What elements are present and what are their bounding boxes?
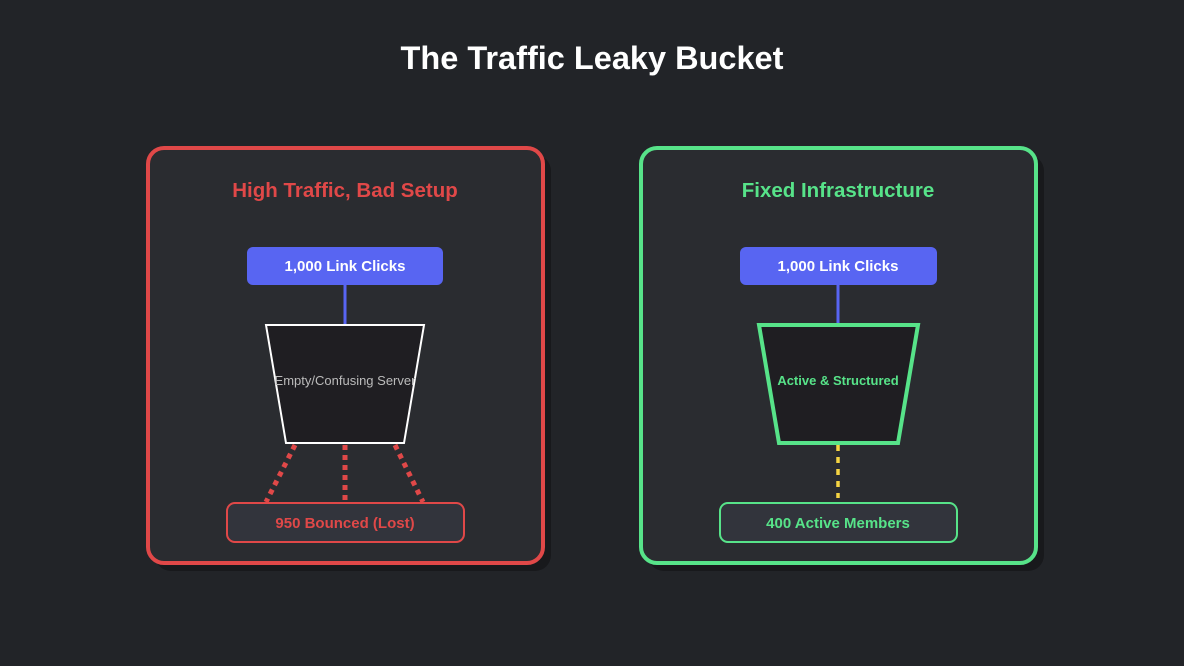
box: link clicks left: [247, 247, 443, 285]
connector right: [836, 285, 840, 325]
title: The Traffic Leaky Bucket: [401, 40, 784, 76]
box: bounced: [227, 503, 464, 542]
box: link clicks right: 1,000 Link Clicks: [778, 258, 898, 275]
bucket: empty server: Empty/Confusing Server: [275, 373, 416, 388]
flow dots: [836, 445, 840, 498]
connector left: [344, 285, 346, 325]
box: link clicks left: 1,000 Link Clicks: [285, 258, 405, 275]
panel: fixed infrastructure: [641, 148, 1044, 571]
heading: left panel: High Traffic, Bad Setup: [232, 179, 458, 202]
box: bounced: 950 Bounced (Lost): [275, 515, 415, 532]
box: active members: 400 Active Members: [766, 515, 910, 532]
box: link clicks right: [740, 247, 937, 285]
heading: right panel: Fixed Infrastructure: [742, 179, 934, 202]
leaks: [266, 445, 423, 502]
box: active members: [720, 503, 957, 542]
bucket: empty server: [266, 325, 424, 443]
bucket: active: Active & Structured: [777, 373, 899, 388]
bucket: active: [759, 325, 918, 443]
panel: high traffic bad setup: [148, 148, 551, 571]
